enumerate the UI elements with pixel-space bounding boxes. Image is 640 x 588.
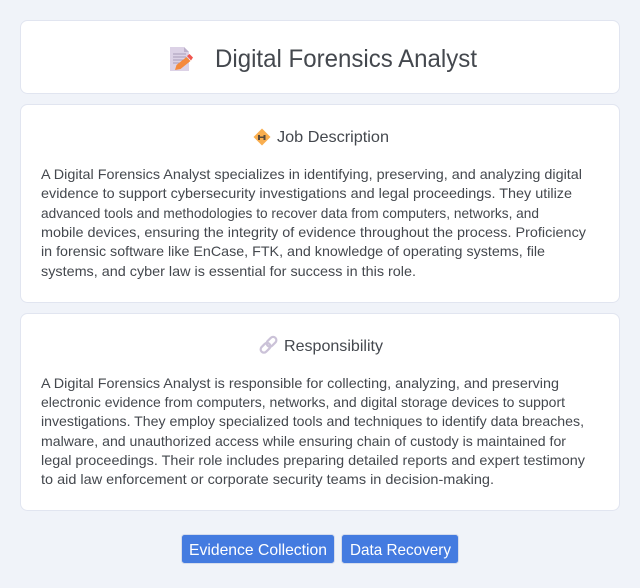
text block: responsibility: legal proceedings. Their role includes preparing detailed reports and expert testimony: [41, 452, 585, 468]
text block: job description: advanced tools and methodologies to recover data from computers, networks, and: [41, 205, 539, 221]
icon: chain link: [259, 336, 278, 354]
text block: responsibility: A Digital Forensics Analyst is responsible for collecting, analyzing, and preserving: [41, 375, 559, 391]
text block: job description: systems, and cyber law is essential for success in this role.: [41, 263, 416, 279]
text block: job description: in forensic software like EnCase, FTK, and knowledge of operating systems, file: [41, 243, 545, 259]
panel: title: [20, 20, 620, 94]
tag: data recovery: Data Recovery: [350, 542, 451, 559]
panel: job description: [20, 104, 620, 302]
tag: evidence collection: [182, 534, 334, 564]
panel: responsibility: [20, 314, 620, 510]
tag: data recovery: [342, 534, 458, 564]
text block: job description: mobile devices, ensuring the integrity of evidence throughout the process. Proficiency: [41, 224, 586, 240]
text block: job description: A Digital Forensics Analyst specializes in identifying, preserving, and analyzing digital: [41, 166, 582, 182]
text block: responsibility: malware, and unauthorized access while ensuring chain of custody is maintained for: [41, 433, 566, 449]
tag: evidence collection: Evidence Collection: [189, 542, 327, 559]
text block: job description: evidence to support cybersecurity investigations and legal proceedings. They utilize: [41, 185, 572, 201]
text block: responsibility: investigations. They employ specialized tools and techniques to identify data breaches,: [41, 413, 584, 429]
heading: job description: Job Description: [277, 129, 389, 146]
title text: Digital Forensics Analyst: [215, 45, 477, 73]
heading: responsibility: Responsibility: [284, 338, 383, 355]
text block: job description: [41, 166, 586, 279]
icon: diamond sign: [254, 128, 270, 146]
text block: responsibility: to aid law enforcement or corporate security teams in decision-making.: [41, 471, 494, 487]
icon: document with pencil: [170, 47, 193, 71]
text block: responsibility: electronic evidence from computers, networks, and digital storage devices to support: [41, 394, 565, 410]
text block: responsibility: [41, 375, 585, 487]
